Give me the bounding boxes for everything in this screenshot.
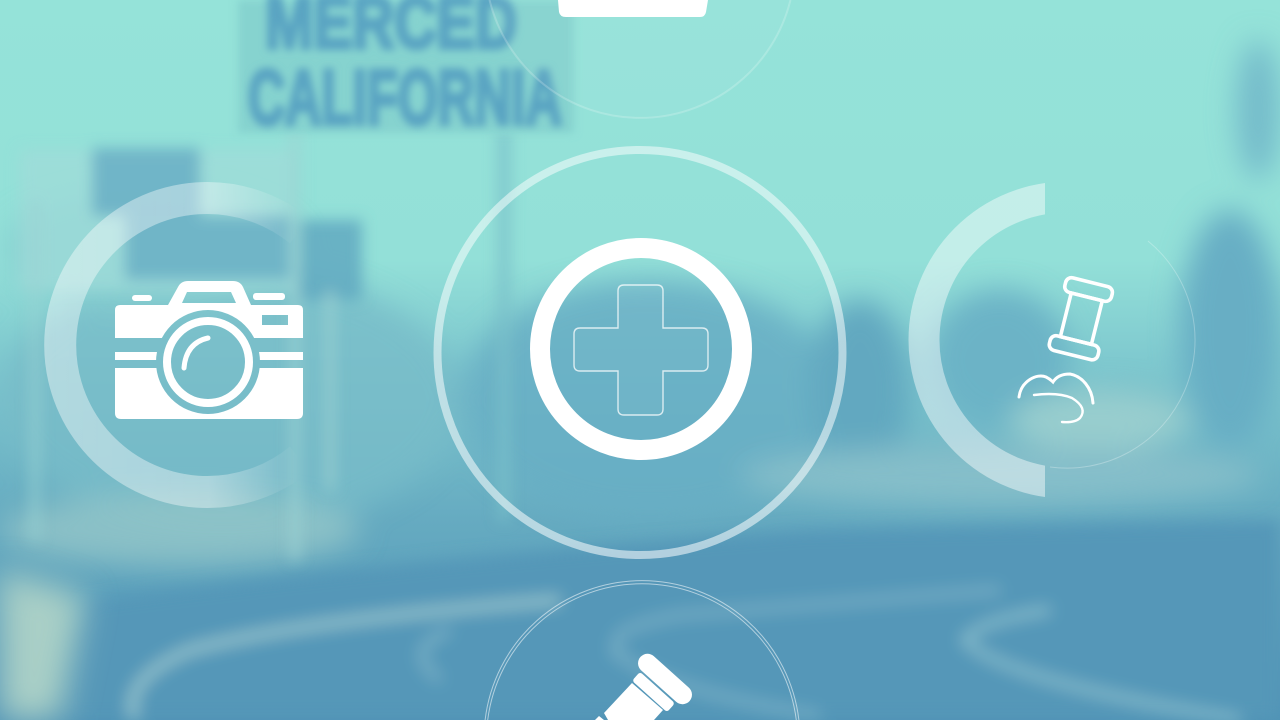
- left camera circle: [60, 198, 303, 492]
- right circle with outlined icons: [924, 197, 1210, 483]
- background: light verge corner: [0, 570, 85, 720]
- icon: solid gavel head: [595, 650, 696, 720]
- center medical circle: [438, 150, 842, 555]
- background: Merced California highway sign: [238, 0, 574, 141]
- double thin ring: [485, 581, 799, 720]
- background: Merced California highway sign: CALIFORNIA: [248, 53, 562, 141]
- background: road and verge: [60, 520, 1280, 720]
- thin circle outline: [1050, 241, 1195, 468]
- bottom partial circle with gavel: [485, 581, 799, 720]
- icon: camera: [115, 281, 303, 419]
- outer thin ring: [438, 150, 842, 555]
- left partial ring: [60, 198, 300, 492]
- icon: gavel head outline: [1048, 276, 1115, 361]
- background: distant tree line: [0, 40, 1280, 566]
- right partial ring: [908, 183, 1045, 497]
- inner thick ring: [540, 248, 742, 450]
- top partial circle with icon: [490, 0, 790, 118]
- icon: gavel base stroke: [1019, 374, 1093, 422]
- background: roadside signs: [20, 130, 510, 560]
- icon: medical cross outline: [574, 285, 708, 415]
- icon: cropped white bar: [558, 0, 708, 17]
